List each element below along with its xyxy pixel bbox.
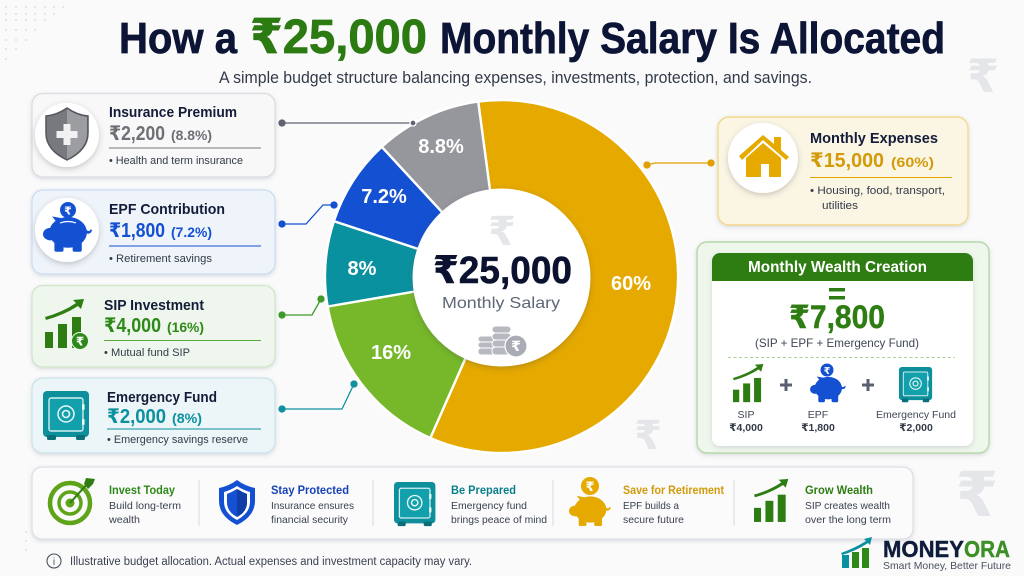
icon: gold piggy: ₹ — [585, 479, 595, 494]
plus — [862, 379, 874, 391]
connector: SIP — [279, 296, 324, 318]
icon: safe — [394, 482, 435, 526]
icon: target — [50, 478, 95, 523]
item: SIP — [729, 409, 763, 434]
equals sign — [829, 288, 845, 300]
tip: save for retirement: secure future — [623, 514, 684, 526]
tip: stay protected: Insurance ensures — [271, 500, 354, 512]
item: EPF: EPF — [808, 409, 828, 421]
connector: insurance — [279, 120, 416, 126]
donut centre — [412, 188, 590, 366]
heading: Insurance Premium — [109, 104, 237, 121]
watermark rupee bottom right: ₹ — [955, 458, 999, 531]
amount: ₹2,200 — [109, 123, 165, 145]
label 16%: 16% — [371, 342, 411, 364]
amount: ₹15,000 — [810, 150, 884, 172]
wordmark — [883, 536, 1010, 562]
icon: SIP bars — [733, 364, 763, 402]
icon: growth bars with coin: ₹ — [76, 334, 84, 348]
footnote: Illustrative budget allocation. Actual expenses and investment capacity may vary. — [70, 556, 472, 568]
heading: Monthly Wealth Creation — [748, 259, 927, 276]
icon: coins: ₹ — [511, 338, 521, 354]
header band — [712, 253, 973, 281]
panel: SIP investment — [32, 286, 275, 367]
centre amount: ₹25,000 — [433, 250, 572, 292]
tip: invest today: Build long-term — [109, 500, 181, 512]
tip: invest today: wealth — [108, 514, 140, 526]
tip: grow wealth — [805, 483, 891, 526]
connector: emergency — [279, 381, 357, 412]
amount: ₹2,000 — [107, 406, 166, 428]
title — [119, 11, 945, 64]
tip: grow wealth: over the long term — [805, 514, 891, 526]
connector: expenses — [644, 160, 714, 168]
logo mark — [841, 537, 872, 568]
icon: growth bars with coin — [45, 299, 88, 350]
panel: monthly expenses: (60%) — [891, 154, 934, 170]
panel: EPF contribution: (7.2%) — [171, 224, 212, 240]
note: • Retirement savings — [109, 253, 213, 265]
subtitle: A simple budget structure balancing expenses, investments, protection, and savings. — [219, 69, 812, 87]
wordmark: ORA — [964, 536, 1010, 562]
title: Monthly Salary Is Allocated — [440, 14, 945, 63]
heading: SIP Investment — [104, 297, 204, 314]
heading: EPF Contribution — [109, 201, 225, 218]
panel: EPF contribution — [32, 190, 275, 274]
icon: gold piggy — [569, 477, 611, 526]
note — [810, 185, 945, 212]
panel: bottom tips — [32, 467, 913, 539]
tip: stay protected: financial security — [271, 514, 349, 526]
panel: insurance premium: (8.8%) — [171, 127, 212, 143]
note: • Housing, food, transport, — [810, 185, 945, 197]
title: ₹25,000 — [250, 11, 427, 64]
item: EPF: ₹1,800 — [801, 422, 835, 434]
icon: emergency safe — [899, 367, 932, 402]
icon: safe — [43, 391, 89, 440]
slice: monthly expenses — [430, 100, 678, 453]
panel: SIP investment: (16%) — [167, 319, 204, 335]
title: How a — [119, 14, 237, 63]
icon: house — [739, 135, 789, 177]
icon: EPF piggy: ₹ — [824, 366, 831, 377]
slice: EPF — [334, 147, 502, 276]
logo: Moneyora — [841, 536, 1011, 572]
note: • Emergency savings reserve — [107, 434, 248, 446]
tip: grow wealth: Grow Wealth — [805, 483, 873, 497]
label 8.8%: 8.8% — [418, 136, 464, 158]
tip: invest today — [108, 483, 181, 526]
item: emergency fund — [876, 409, 956, 434]
tip: be prepared: Emergency fund — [451, 500, 527, 512]
tip: save for retirement — [623, 483, 724, 526]
item: SIP: SIP — [738, 409, 754, 421]
icon: piggy bank — [43, 202, 92, 252]
icon: info — [47, 554, 61, 568]
donut chart — [325, 100, 678, 453]
note: • Mutual fund SIP — [104, 347, 190, 359]
tip: stay protected: Stay Protected — [271, 483, 349, 497]
panel: monthly expenses — [718, 117, 968, 225]
watermark rupee near donut: ₹ — [634, 413, 662, 459]
formula note: (SIP + EPF + Emergency Fund) — [755, 336, 919, 350]
slice: SIP — [328, 276, 502, 438]
heading: Emergency Fund — [107, 389, 217, 406]
heading: Monthly Expenses — [810, 130, 938, 147]
item: EPF — [801, 409, 835, 434]
tip: grow wealth: SIP creates wealth — [805, 500, 890, 512]
icon: shield — [46, 108, 88, 160]
tip: be prepared: Be Prepared — [451, 483, 516, 497]
panel: emergency fund — [32, 378, 275, 453]
icon: EPF piggy — [810, 364, 846, 402]
amount: ₹1,800 — [109, 220, 165, 242]
centre label: Monthly Salary — [442, 295, 560, 312]
slice: emergency fund — [325, 221, 502, 306]
label 60%: 60% — [611, 273, 651, 295]
tip: be prepared — [451, 483, 547, 526]
slice: insurance — [382, 102, 502, 276]
note: utilities — [822, 200, 859, 212]
amount: ₹4,000 — [104, 315, 161, 337]
decorative dots — [5, 6, 64, 551]
tip: be prepared: brings peace of mind — [451, 514, 547, 526]
wordmark: MONEY — [883, 536, 964, 562]
icon: info: i — [53, 557, 55, 568]
item: SIP: ₹4,000 — [729, 422, 763, 434]
icon: coins — [478, 326, 527, 357]
icon: growth bars — [754, 479, 788, 522]
tip: invest today: Invest Today — [109, 483, 175, 497]
plus — [780, 379, 792, 391]
total amount: ₹7,800 — [789, 299, 885, 335]
tip: save for retirement: Save for Retirement — [623, 483, 724, 497]
tip: stay protected — [271, 483, 354, 526]
item: emergency fund: Emergency Fund — [876, 409, 956, 421]
panel: emergency fund: (8%) — [172, 410, 202, 426]
panel: monthly wealth creation — [697, 242, 989, 453]
centre watermark rupee: ₹ — [488, 209, 516, 255]
note: • Health and term insurance — [109, 155, 243, 167]
connector: EPF — [279, 202, 337, 227]
watermark rupee top right: ₹ — [967, 49, 999, 103]
icon: blue shield — [219, 480, 255, 525]
icon: piggy bank: ₹ — [64, 206, 72, 218]
tip: save for retirement: EPF builds a — [623, 500, 679, 512]
label 8%: 8% — [348, 258, 377, 280]
tagline: Smart Money, Better Future — [883, 560, 1011, 572]
panel: insurance premium — [32, 94, 275, 177]
label 7.2%: 7.2% — [361, 186, 407, 208]
item: emergency fund: ₹2,000 — [899, 422, 933, 434]
